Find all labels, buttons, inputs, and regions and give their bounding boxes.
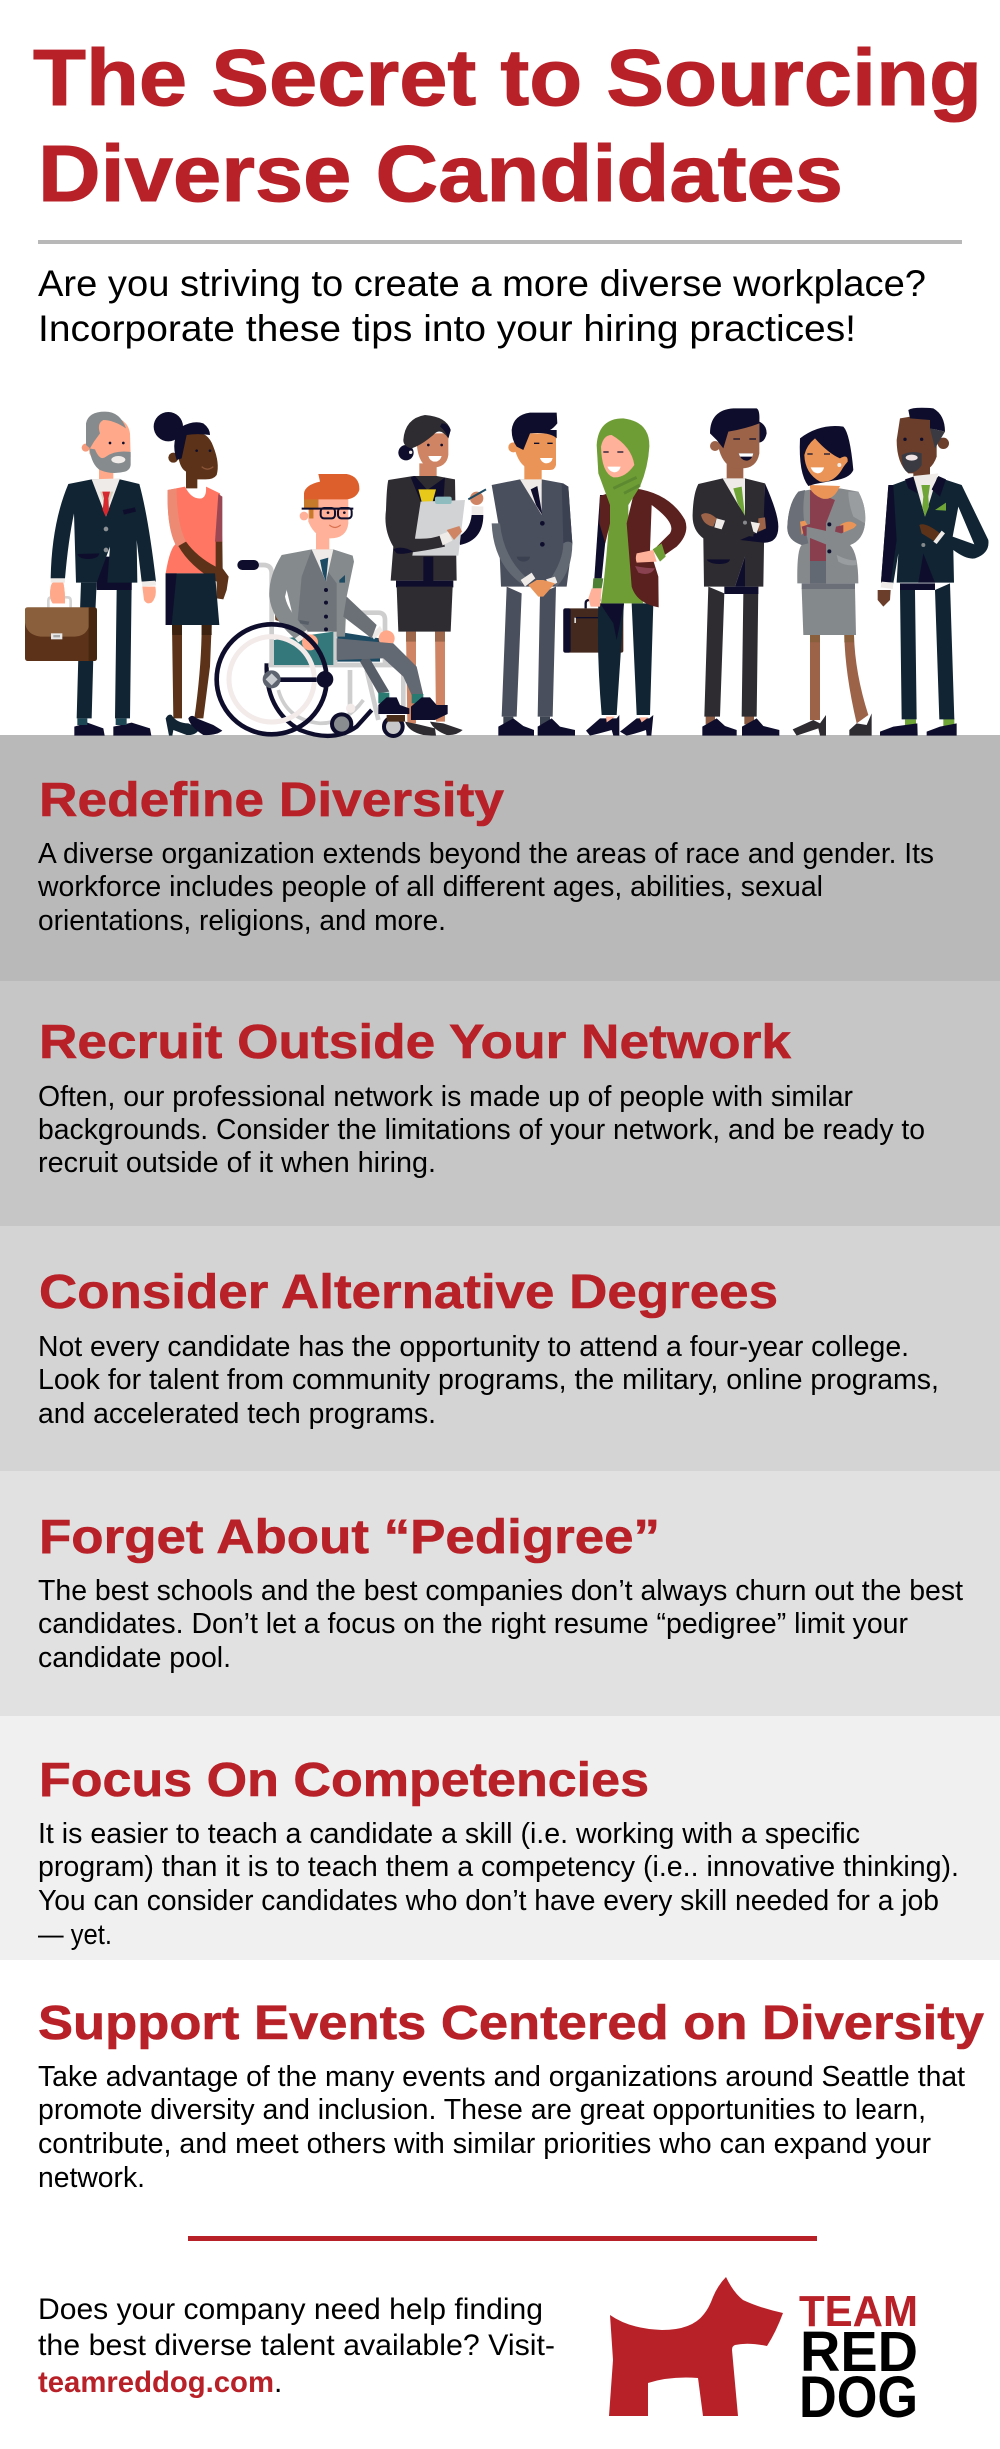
person: man in wheelchair (217, 474, 448, 736)
logo wordmark (799, 2287, 918, 2430)
text: support events: promote diversity and inclusion. These are great opportunities to learn, (38, 2094, 926, 2126)
intro text: Incorporate these tips into your hiring practices! (38, 308, 856, 349)
panel: support events centered on diversity (38, 1997, 984, 2194)
text: focus on competencies: — yet. (38, 1919, 112, 1951)
text: redefine diversity: orientations, religions, and more. (38, 905, 446, 937)
footer call to action: . (274, 2366, 282, 2399)
person: man with crossed arms (693, 408, 779, 736)
heading: forget about pedigree: Forget About “Pedigree” (39, 1511, 660, 1564)
person: man in grey suit (492, 413, 575, 736)
person: man with green tie (878, 408, 988, 736)
text: recruit outside your network: recruit outside of it when hiring. (38, 1147, 436, 1179)
person: woman in grey blazer (787, 426, 872, 736)
text: forget about pedigree: The best schools and the best companies don’t always churn out the best (38, 1575, 963, 1607)
title (33, 33, 982, 218)
footer call to action: Does your company need help finding (38, 2293, 543, 2326)
text: recruit outside your network: backgrounds. Consider the limitations of your network, and be ready to (38, 1114, 925, 1146)
panel: consider alternative degrees (0, 1226, 1000, 1471)
logo: team red dog (609, 2277, 918, 2430)
heading: support events: Support Events Centered on Diversity (38, 1997, 984, 2050)
text: recruit outside your network (38, 1081, 925, 1179)
heading: redefine diversity: Redefine Diversity (39, 774, 504, 827)
icon: red dog (609, 2277, 783, 2416)
logo wordmark: RED (800, 2320, 918, 2384)
footer call to action: the best diverse talent available? Visit- (38, 2329, 555, 2362)
person: woman with clipboard (385, 415, 486, 736)
person: woman in coral dress (154, 412, 229, 736)
panel: forget about pedigree (0, 1471, 1000, 1716)
text: consider alternative degrees: Look for talent from community programs, the military, online programs, (38, 1364, 939, 1396)
text: focus on competencies: You can consider candidates who don’t have every skill needed for a job (38, 1885, 939, 1917)
title: The Secret to Sourcing (33, 33, 982, 122)
text: support events: contribute, and meet others with similar priorities who can expand your (38, 2128, 932, 2160)
text: focus on competencies (38, 1818, 959, 1951)
text: redefine diversity: A diverse organization extends beyond the areas of race and gender. Its (38, 838, 934, 870)
logo wordmark: TEAM (799, 2287, 918, 2336)
text: consider alternative degrees (38, 1331, 939, 1430)
intro text (38, 263, 926, 349)
panel: redefine diversity (0, 735, 1000, 981)
text: consider alternative degrees: and accelerated tech programs. (38, 1398, 436, 1430)
illustration: diverse group of people (25, 408, 988, 736)
heading: focus on competencies: Focus On Competencies (39, 1754, 649, 1807)
person: woman in green hijab (563, 418, 686, 736)
text: forget about pedigree: candidates. Don’t let a focus on the right resume “pedigree” limit your (38, 1608, 908, 1640)
text: consider alternative degrees: Not every candidate has the opportunity to attend a four-year college. (38, 1331, 909, 1363)
text: focus on competencies: program) than it is to teach them a competency (i.e.. innovative thinking). (38, 1851, 959, 1883)
text: support events: network. (38, 2162, 145, 2194)
footer call to action: teamreddog.com (38, 2366, 274, 2399)
heading: consider alternative degrees: Consider Alternative Degrees (39, 1266, 778, 1319)
text: focus on competencies: It is easier to teach a candidate a skill (i.e. working with a specific (38, 1818, 860, 1850)
text: support events (38, 2061, 965, 2194)
logo wordmark: DOG (799, 2365, 918, 2430)
footer call to action (38, 2293, 555, 2399)
text: redefine diversity (37, 838, 934, 937)
panel: recruit outside your network (0, 981, 1000, 1226)
text: redefine diversity: workforce includes people of all different ages, abilities, sexual (37, 871, 823, 903)
text: recruit outside your network: Often, our professional network is made up of people with similar (38, 1081, 854, 1113)
text: support events: Take advantage of the many events and organizations around Seattle that (38, 2061, 965, 2093)
panel: focus on competencies (0, 1716, 1000, 1960)
title: Diverse Candidates (38, 129, 843, 218)
intro text: Are you striving to create a more diverse workplace? (38, 263, 926, 304)
heading: recruit outside your network: Recruit Outside Your Network (39, 1016, 791, 1069)
text: forget about pedigree (38, 1575, 963, 1674)
text: forget about pedigree: candidate pool. (38, 1642, 231, 1674)
person: older man with briefcase (25, 412, 156, 736)
